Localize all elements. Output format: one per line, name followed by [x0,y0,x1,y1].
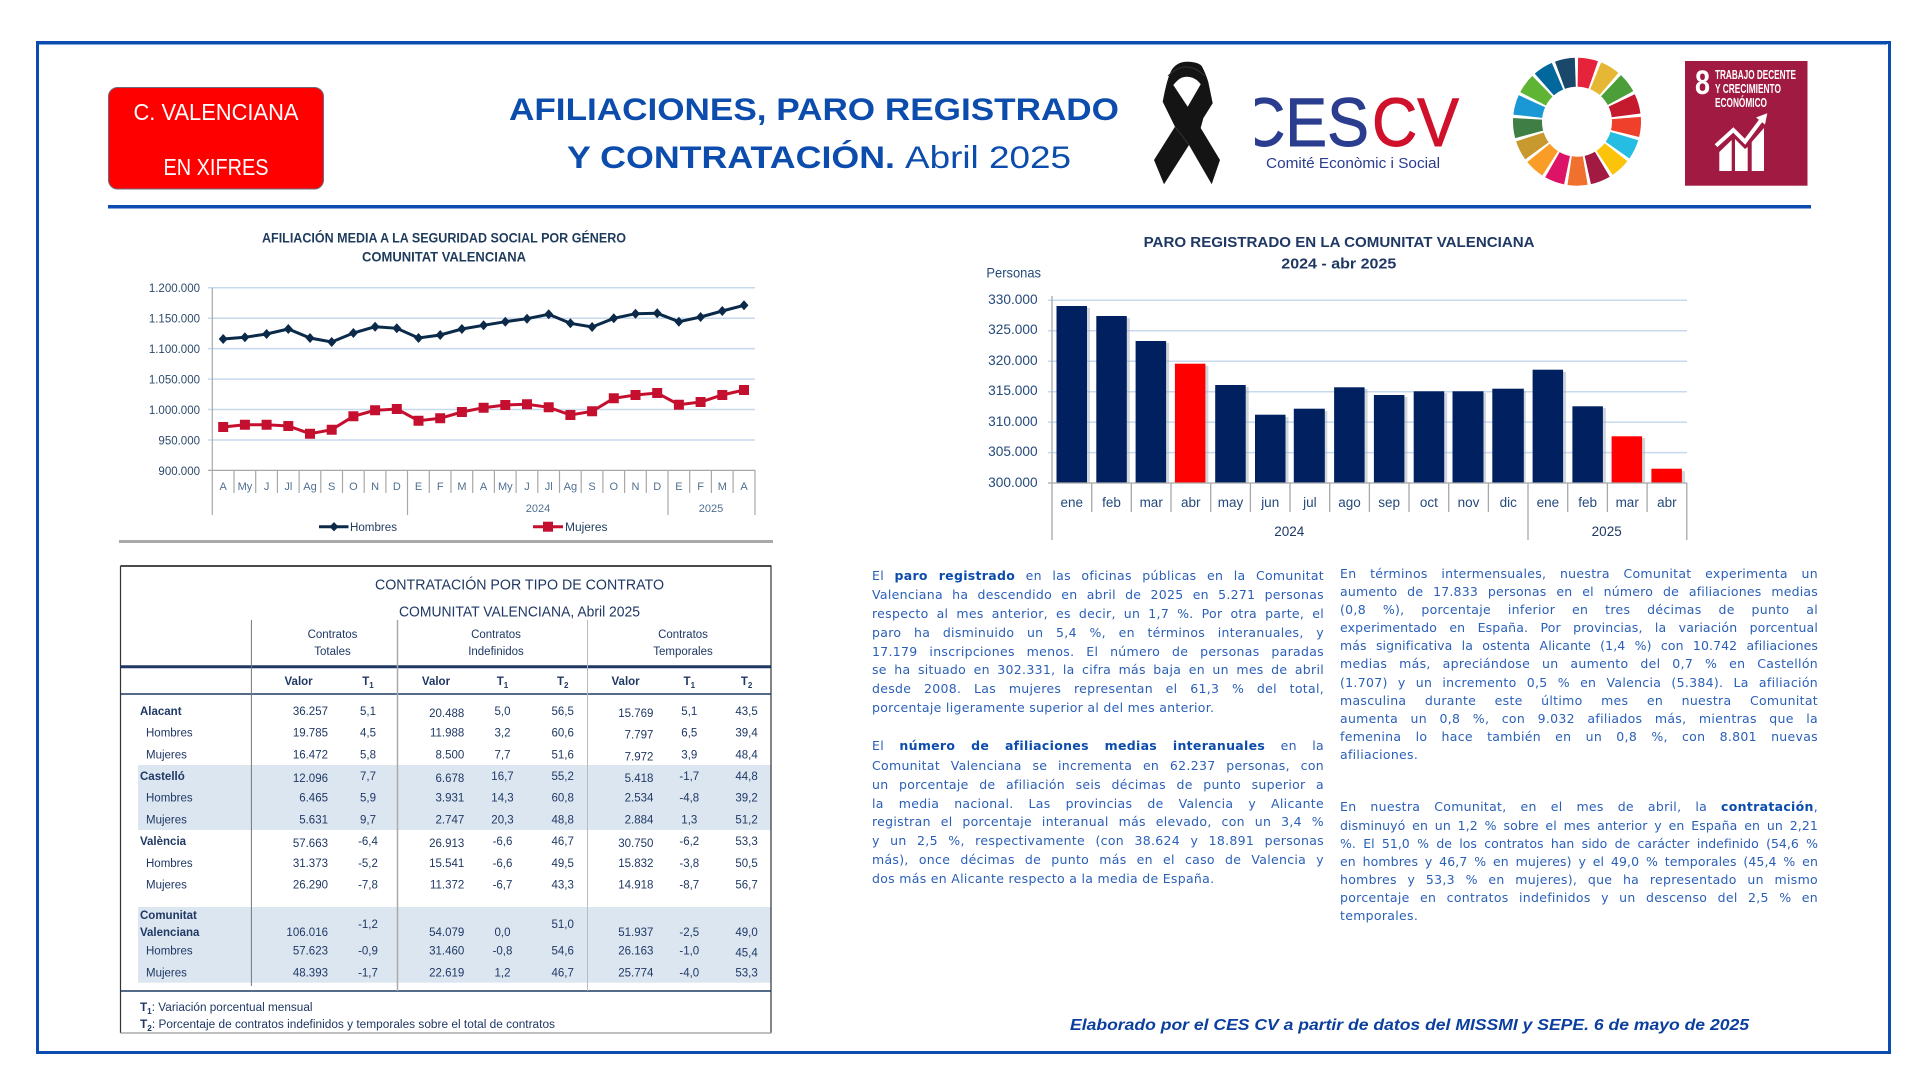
source footer: Elaborado por el CES CV a partir de datos del MISSMI y SEPE. 6 de mayo de 2025 [1070,1017,1750,1034]
x axis labels: J [524,481,530,493]
legend: Mujeres [565,522,608,534]
row: Castelló Mujeres: 20,3 [491,814,514,826]
column sub headers: T [741,676,748,688]
row: València: 30.750 [618,838,653,850]
chart title [262,230,626,264]
row: Comunitat Mujeres: 48.393 [293,967,328,979]
icon: black mourning ribbon [1154,62,1220,184]
row: Alacant Mujeres: 3,9 [681,749,697,761]
row: València Hombres: 31.373 [293,858,328,870]
row: Comunitat Valenciana: 51,0 [552,919,574,931]
table footnotes: : Variación porcentual mensual [152,1002,312,1014]
x axis labels: M [457,481,466,493]
text block: términos intermensuales: aumento de 17.833 personas en el número de afiliaciones medias [1340,584,1818,599]
x axis labels: Ag [564,481,577,493]
table borders [120,566,772,1033]
column group headers [308,629,713,658]
row: Alacant: 43,5 [735,706,758,718]
text block: contratación: En nuestra Comunitat, en el mes de abril, la contratación, [1340,799,1818,814]
column sub headers: Valor [422,676,451,688]
table title [375,576,664,620]
x axis labels: J [264,481,269,493]
row: Comunitat Valenciana: 51.937 [618,927,653,939]
y axis labels: 950.000 [158,436,200,448]
row: Castelló: 6.678 [436,773,464,785]
text block: paro registrado [872,568,1324,715]
text block: paro registrado: respecto al mes anterior, es decir, un 1,7 %. Por otra parte, el [872,606,1324,621]
row: València Mujeres: -7,8 [358,880,378,892]
row: Alacant Mujeres: 7.972 [625,751,653,763]
text block: contratación: %. El 51,0 % de los contratos han sido de carácter indefinido (54,6 % [1340,836,1818,851]
x axis labels: oct [1420,495,1438,510]
row: Alacant Mujeres: 16.472 [293,749,328,761]
text block: afiliaciones interanuales: dos más en Alicante respecto a la media de España. [872,871,1214,886]
row: Comunitat Mujeres: 25.774 [618,967,654,979]
column sub headers: T [557,676,564,688]
row: València: -6,6 [493,836,512,848]
table title: CONTRATACIÓN POR TIPO DE CONTRATO [375,576,664,594]
row: Castelló: Castelló [140,771,185,783]
row: València Mujeres: 43,3 [552,880,574,892]
row: Alacant Hombres: 6,5 [681,728,697,740]
row: Comunitat Valenciana: 54.079 [429,927,464,939]
row: Alacant: 20.488 [429,708,464,720]
series: Mujeres [218,385,749,439]
row: Comunitat Hombres: -0,8 [493,946,512,958]
x axis labels: abr [1181,495,1201,510]
x axis labels: S [588,481,596,493]
text block: términos intermensuales: experimentado en España. Por provincias, la variación porcentual [1340,620,1818,635]
column sub headers: T [362,676,369,688]
y axis labels: 305.000 [988,444,1038,459]
row: Castelló: 5.418 [625,773,653,785]
series: Hombres [219,300,748,347]
row: Castelló Mujeres: 9,7 [360,814,376,826]
row: València [140,836,758,850]
row: València Hombres: Hombres [146,858,193,870]
column sub headers [285,676,753,690]
y axis labels: 315.000 [988,383,1038,398]
row: Castelló Hombres: 60,8 [552,793,574,805]
logo: CES CV: CV [1372,84,1459,161]
axis unit label: Personas [986,264,1041,280]
y axis labels: 1.000.000 [149,405,200,417]
row: Comunitat Valenciana: -2,5 [679,927,699,939]
text block: afiliaciones interanuales: y un 2,5 %, respectivamente (con 38.624 y 18.891 personas [872,833,1324,848]
text block: términos intermensuales: femenina lo hace también en un 0,8 %, con 8.801 nuevas [1340,729,1818,744]
x axis labels: M [718,481,727,493]
text block: términos intermensuales: (0,8 %), porcentaje inferior en tres décimas de punto al [1340,602,1818,617]
x axis labels: may [1218,495,1243,510]
x axis labels: ago [1338,495,1361,510]
row: València Hombres: -3,8 [679,858,699,870]
column group headers: Contratos [308,629,358,641]
row: Comunitat Hombres: -1,0 [679,946,699,958]
x axis labels: S [328,481,335,493]
row: Castelló: 44,8 [735,771,758,783]
row: Comunitat Valenciana: Comunitat [140,910,197,922]
x axis labels: N [371,481,379,493]
row: Alacant Hombres: 60,6 [552,728,574,740]
text block: términos intermensuales: aumenta un 0,8 %, con 9.032 afiliados más, mientras que la [1340,711,1818,726]
x axis labels: A [220,481,228,493]
x axis labels: jun [1260,495,1279,510]
x axis labels: Ag [303,481,317,493]
text block: paro registrado: Valenciana ha descendido en abril de 2025 en 5.271 personas [872,587,1324,602]
x axis labels [220,481,748,515]
x axis [208,288,755,515]
row: Castelló: 55,2 [552,771,574,783]
row: València Hombres: 15.541 [429,858,464,870]
x axis labels: D [393,481,401,493]
row: Comunitat Mujeres: Mujeres [146,967,187,979]
x axis labels: D [653,481,661,493]
text block: términos intermensuales: En términos intermensuales, nuestra Comunitat experimenta un [1340,566,1818,581]
text block: paro registrado: se ha situado en 302.331, la cifra más baja en un mes de abril [872,662,1324,677]
icon: SDG 8 decent work tile: TRABAJO DECENTE [1715,67,1796,82]
column sub headers: T [497,676,504,688]
row: Comunitat Hombres: 57.623 [293,946,328,958]
row: Alacant Hombres [146,728,758,742]
row: València: 46,7 [552,836,574,848]
text block: paro registrado: desde 2008. Las mujeres representan el 61,3 % del total, [872,681,1324,696]
row: Comunitat Hombres: 31.460 [429,946,464,958]
column sub headers: 1 [691,681,696,690]
text block: contratación: temporales. [1340,908,1418,923]
row: Castelló [140,771,758,785]
row: Alacant: 15.769 [618,708,653,720]
row: Castelló Hombres: Hombres [146,793,193,805]
column group headers: Contratos [471,629,521,641]
column sub headers: 2 [748,681,753,690]
x axis labels: A [480,481,488,493]
y axis labels: 900.000 [158,466,200,478]
row: València Mujeres: -6,7 [493,880,512,892]
chart title: PARO REGISTRADO EN LA COMUNITAT VALENCIANA [1144,234,1535,251]
text block: contratación: porcentaje en contratos indefinidos y un descenso del 2,5 % en [1340,890,1818,905]
gridlines [1048,300,1687,453]
row: Alacant: 36.257 [293,706,328,718]
table shaded bands [138,765,771,983]
row: València Mujeres [146,880,758,892]
bar shadows [1060,308,1685,483]
row: Castelló Mujeres: 51,2 [735,814,758,826]
row: Castelló Hombres [146,793,758,805]
row: Comunitat Mujeres: 1,2 [494,967,510,979]
row: Castelló Hombres: 39,2 [735,793,758,805]
text block: paro registrado: paro ha disminuido un 5,4 %, en términos interanuales, y [872,625,1324,640]
legend: Hombres [350,522,397,534]
icon: SDG colour wheel [1507,52,1647,192]
text block: términos intermensuales: afiliaciones. [1340,747,1418,762]
x axis labels: 2025 [1592,524,1622,539]
row: Comunitat Mujeres: -1,7 [358,967,378,979]
chart title [1144,234,1535,272]
column sub headers: 2 [564,681,569,690]
row: València Mujeres: Mujeres [146,880,187,892]
row: Comunitat Valenciana: 0,0 [494,927,510,939]
row: Castelló Hombres: 14,3 [491,793,514,805]
row: Castelló Hombres: 3.931 [436,793,464,805]
x axis labels: My [498,481,513,493]
text block: afiliaciones interanuales: la media nacional. Las provincias de Valencia y Alicante [872,796,1324,811]
x axis labels: A [740,481,748,493]
row: Castelló Mujeres: Mujeres [146,814,187,826]
row: Castelló Mujeres: 2.747 [436,814,464,826]
row: Alacant [140,706,758,720]
badge: C. Valenciana en xifres: C. VALENCIANA [134,99,299,125]
row: València Hombres: -6,6 [493,858,512,870]
x axis labels: F [437,481,444,493]
row: Comunitat Mujeres: -4,0 [679,967,699,979]
chart title: 2024 - abr 2025 [1281,256,1396,272]
icon: SDG 8 decent work tile: Y CRECIMIENTO [1715,81,1781,96]
text block: contratación: hombres y 53,3 % en mujeres), que ha representado un mismo [1340,872,1818,887]
x axis labels: N [632,481,640,493]
text block: afiliaciones interanuales: Comunitat Valenciana se incrementa en 62.237 personas, con [872,758,1324,773]
y axis labels: 1.050.000 [149,374,200,386]
x axis labels: My [238,481,253,493]
x axis labels: mar [1616,495,1639,510]
bars [1056,306,1682,483]
icon: SDG 8 decent work tile: ECONÓMICO [1715,95,1767,110]
x axis labels: E [415,481,422,493]
y axis labels: 310.000 [988,414,1038,429]
column group headers: Temporales [653,646,713,658]
x axis labels: Jl [545,481,553,493]
row: València Mujeres: 14.918 [618,880,653,892]
title: Abril 2025 [905,139,1071,175]
row: València Mujeres: -8,7 [679,880,699,892]
row: Castelló Hombres: 5,9 [360,793,376,805]
chart title: AFILIACIÓN MEDIA A LA SEGURIDAD SOCIAL POR GÉNERO [262,230,626,246]
x axis labels: E [675,481,683,493]
row: Comunitat Hombres [146,946,758,960]
text block: paro registrado: El paro registrado en las oficinas públicas en la Comunitat [872,568,1324,583]
column group headers: Indefinidos [468,646,524,658]
text block: contratación [1340,799,1818,923]
row: Alacant Hombres: 4,5 [360,728,376,740]
row: Alacant Mujeres: 5,8 [360,749,376,761]
icon: SDG 8 decent work tile: 8 [1695,64,1710,102]
table footnotes: : Porcentaje de contratos indefinidos y temporales sobre el total de contratos [152,1019,555,1031]
text block: paro registrado: 17.179 inscripciones menos. El número de personas paradas [872,644,1324,659]
chart title: COMUNITAT VALENCIANA [362,250,526,264]
x axis labels: feb [1578,495,1597,510]
row: Castelló: -1,7 [679,771,699,783]
row: Alacant Hombres: 19.785 [293,728,328,740]
x axis labels: nov [1458,495,1480,510]
row: València Mujeres: 11.372 [430,880,464,892]
text block: términos intermensuales: más significativa la ostenta Alicante (1,4 %) con 10.742 afiliaciones [1340,638,1818,653]
x axis labels: Jl [284,481,292,493]
row: València: 57.663 [293,838,328,850]
title: AFILIACIONES, PARO REGISTRADO [509,91,1119,127]
row: Castelló Hombres: -4,8 [679,793,699,805]
column group headers: Contratos [658,629,708,641]
row: València: -6,2 [679,836,699,848]
table footnotes: T [140,1002,152,1016]
x axis labels: dic [1500,495,1517,510]
row: Castelló Mujeres: 48,8 [552,814,574,826]
text block: afiliaciones interanuales: El número de afiliaciones medias interanuales en la [872,738,1324,753]
row: Comunitat Valenciana: 49,0 [735,927,758,939]
row: Alacant: 5,1 [360,706,376,718]
logo: CES CV: CES [1240,84,1369,161]
row: Alacant: 5,0 [494,706,510,718]
column sub headers: T [684,676,691,688]
row: Alacant: 56,5 [552,706,574,718]
y axis labels [988,292,1038,490]
row: Alacant Mujeres: 48,4 [735,749,758,761]
text block: paro registrado: porcentaje ligeramente superior al del mes anterior. [872,700,1214,715]
text block: contratación: en hombres y 46,7 % en mujeres) y el 49,0 % temporales (45,4 % en [1340,854,1818,869]
row: Alacant Mujeres: 7,7 [494,749,510,761]
table footnotes: 2 [147,1024,152,1033]
row: València Hombres: 15.832 [618,858,653,870]
text block: términos intermensuales: (1.707) y un incremento 0,5 % en Valencia (5.384). La afiliación [1340,675,1818,690]
row: València Hombres: 50,5 [735,858,758,870]
row: València Mujeres: 26.290 [293,880,328,892]
row: València: -6,4 [358,836,379,848]
x axis labels: jul [1302,495,1317,510]
x axis labels: feb [1102,495,1121,510]
text block: afiliaciones interanuales: más), once décimas de punto más en el caso de Valencia y [872,852,1324,867]
badge: C. Valenciana en xifres: EN XIFRES [164,154,268,180]
column sub headers: 1 [369,681,374,690]
row: Comunitat Mujeres: 46,7 [552,967,574,979]
row: Castelló Mujeres: 1,3 [681,814,697,826]
logo: CES CV: Comité Econòmic i Social [1266,155,1440,172]
x axis labels: abr [1657,495,1677,510]
table footnotes: 1 [147,1007,152,1016]
y axis labels [149,283,200,478]
row: Alacant Mujeres: 51,6 [552,749,574,761]
row: València Hombres [146,858,758,870]
row: Comunitat Hombres: Hombres [146,946,193,958]
text block: términos intermensuales [1340,566,1818,762]
row: València Hombres: 49,5 [552,858,574,870]
row: Comunitat Valenciana: -1,2 [358,919,378,931]
badge: C. Valenciana en xifres [108,88,324,189]
row: Alacant Hombres: 3,2 [494,728,510,740]
row: Alacant Mujeres [146,749,758,763]
row: Comunitat Valenciana: Valenciana [140,927,200,939]
y axis labels: 325.000 [988,322,1038,337]
row: Castelló: 12.096 [293,773,328,785]
row: Alacant Hombres: 7.797 [625,730,653,742]
text block: afiliaciones interanuales [872,738,1324,886]
row: Comunitat Hombres: 45,4 [735,948,758,960]
row: Castelló Mujeres [146,814,758,826]
x axis [1048,296,1687,540]
panel: bar chart paro registrado [986,234,1687,540]
table footnotes [140,1002,555,1033]
row: Alacant Mujeres: Mujeres [146,749,187,761]
row: Comunitat Valenciana [140,910,758,939]
y axis labels: 1.200.000 [149,283,200,295]
column sub headers: Valor [285,676,313,688]
row: Alacant Hombres: 39,4 [735,728,758,740]
row: Comunitat Mujeres: 22.619 [429,967,464,979]
row: Comunitat Hombres: 26.163 [618,946,653,958]
logo: CES CV [1255,97,1460,168]
x axis labels: O [349,481,358,493]
table title: COMUNITAT VALENCIANA, Abril 2025 [399,604,640,620]
x axis labels: O [610,481,619,493]
row: Alacant: 5,1 [681,706,697,718]
text block: afiliaciones interanuales: registran el porcentaje interanual más elevado, con un 3,4 % [872,814,1324,829]
icon: SDG 8 decent work tile [1685,61,1808,186]
row: Comunitat Mujeres: 53,3 [735,967,758,979]
row: València Hombres: -5,2 [358,858,378,870]
row: Castelló: 16,7 [491,771,514,783]
row: Alacant Hombres: 11.988 [430,728,464,740]
text block: términos intermensuales: masculina durante este último mes en nuestra Comunitat [1340,693,1818,708]
row: València Mujeres: 56,7 [735,880,758,892]
column group headers: Totales [314,646,351,658]
column sub headers: Valor [612,676,640,688]
panel: line chart afiliación media [119,222,773,544]
row: Alacant Mujeres: 8.500 [436,749,464,761]
y axis labels: 1.150.000 [149,314,200,326]
row: Castelló: 7,7 [360,771,376,783]
text block: términos intermensuales: medias más, apreciándose un aumento del 0,7 % en Castellón [1340,656,1818,671]
title [509,91,1119,175]
x axis labels: sep [1378,495,1400,510]
row: Castelló Mujeres: 5.631 [299,814,328,826]
row: Comunitat Hombres: 54,6 [552,946,574,958]
header rule [108,205,1811,208]
text block: afiliaciones interanuales: un porcentaje de afiliación seis décimas de punto superior a [872,777,1324,792]
title: Y CONTRATACIÓN. [567,139,895,175]
panel: contract table [120,566,772,1033]
x axis labels: mar [1140,495,1163,510]
row: Comunitat Valenciana: 106.016 [286,927,328,939]
row: Alacant Hombres: Hombres [146,728,193,740]
row: Castelló Hombres: 6.465 [299,793,328,805]
x axis labels: F [697,481,704,493]
text block: contratación: disminuyó en un 1,2 % sobre el mes anterior y en España en un 2,21 [1340,818,1818,833]
row: Comunitat Hombres: -0,9 [358,946,378,958]
x axis labels: ene [1537,495,1559,510]
x axis labels: ene [1061,495,1083,510]
row: Comunitat Mujeres [146,967,758,979]
column sub headers: 1 [504,681,509,690]
x axis labels: 2025 [699,503,723,515]
x axis labels: 2024 [526,503,550,515]
row: València: València [140,836,187,848]
table footnotes: T [140,1019,152,1033]
row: València: 26.913 [429,838,464,850]
y axis labels: 300.000 [988,475,1038,490]
y axis labels: 330.000 [988,292,1038,307]
legend [319,522,608,534]
gridlines [208,288,755,440]
row: València: 53,3 [735,836,758,848]
row: Castelló Mujeres: 2.884 [625,814,654,826]
x axis labels [1061,495,1677,539]
row: Castelló Hombres: 2.534 [625,793,654,805]
row: Alacant: Alacant [140,706,182,718]
y axis labels: 1.100.000 [149,344,200,356]
x axis labels: 2024 [1274,524,1305,539]
y axis labels: 320.000 [988,353,1038,368]
